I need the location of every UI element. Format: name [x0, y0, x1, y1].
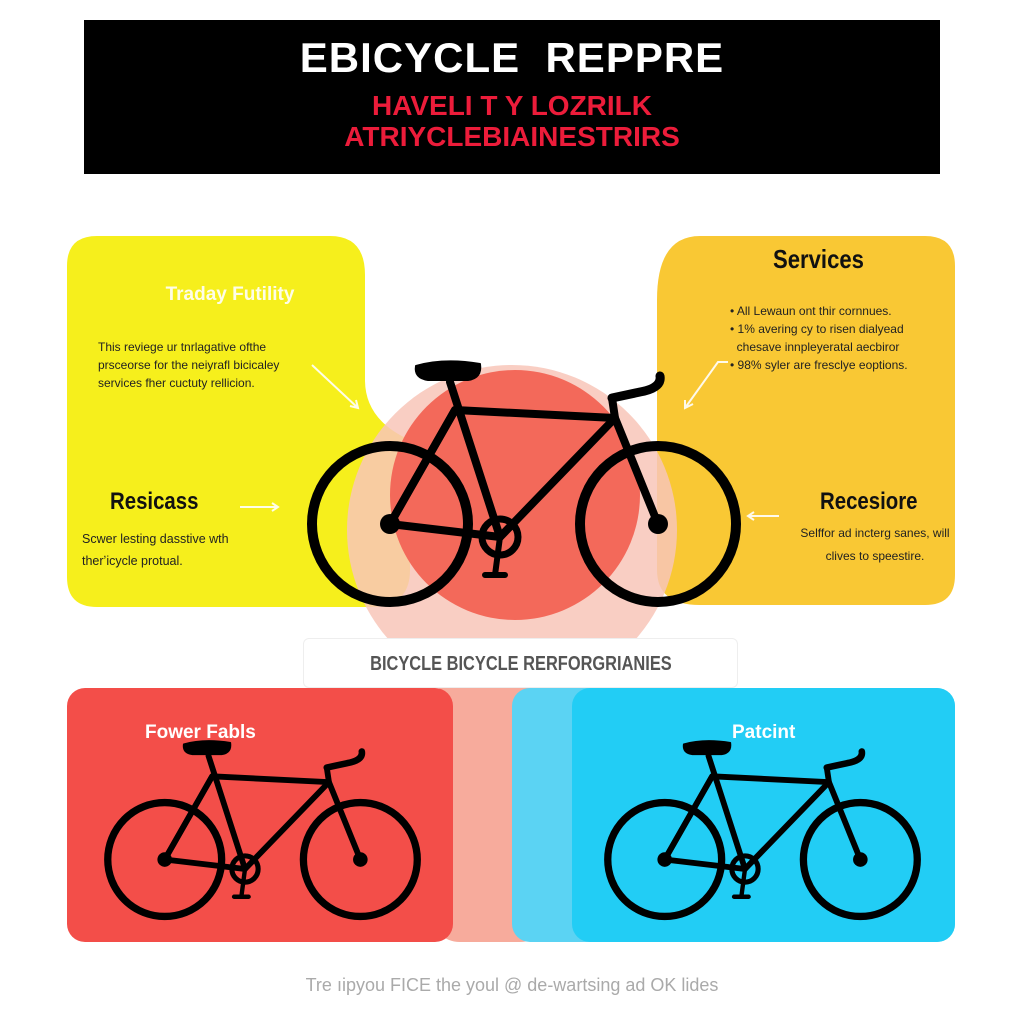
text: Traday Futility: Traday Futility [166, 284, 294, 305]
panel: blue bottom [512, 688, 955, 942]
bicycle: red panel [108, 741, 417, 916]
label bar [303, 638, 738, 688]
text: Recesiore description: Selffor ad incterg sanes, will clives to speestire. [800, 526, 950, 563]
subtitle [344, 90, 680, 152]
panel: red bottom [67, 688, 453, 942]
strip behind bottom panels [430, 680, 550, 942]
central circle [347, 365, 677, 695]
list: services bullets [730, 304, 908, 372]
header banner [84, 20, 940, 174]
list: services bullets: • 98% syler are fresclye eoptions. [730, 358, 908, 372]
list: services bullets: • 1% avering cy to risen dialyead [730, 322, 904, 336]
panel: orange right [657, 236, 955, 605]
main bicycle [312, 361, 736, 602]
heading: Patcint: Patcint [732, 722, 795, 743]
bicycle: blue panel [608, 741, 917, 916]
title: EBICYCLE REPPRE [300, 34, 724, 81]
label bar: BICYCLE BICYCLE RERFORGRIANIES [370, 653, 671, 675]
panel: yellow left [67, 236, 410, 607]
list: services bullets: • All Lewaun ont thir cornnues. [730, 304, 892, 318]
heading: Resicass: Resicass [110, 488, 198, 515]
subtitle: ATRIYCLEBIAINESTRIRS [344, 121, 680, 152]
subtitle: HAVELI T Y LOZRILK [372, 90, 652, 121]
list: services bullets: chesave innpleyeratal aecbiror [737, 340, 899, 354]
heading: Services: Services [773, 244, 864, 274]
footer: Tre ıipyou FICE the youl @ de-wartsing ad OK lides [306, 975, 718, 995]
text: Resicass description: Scwer lesting dasstive wth therʼicycle protual. [82, 532, 229, 568]
heading: Fower Fabls: Fower Fabls [145, 722, 256, 743]
heading: Recesiore: Recesiore [820, 488, 918, 515]
text: left description: This reviege ur tnrlagative ofthe prsceorse for the neiyrafl bicicaley services fher cuctuty rellicion. [98, 340, 279, 390]
arrows [240, 362, 779, 520]
